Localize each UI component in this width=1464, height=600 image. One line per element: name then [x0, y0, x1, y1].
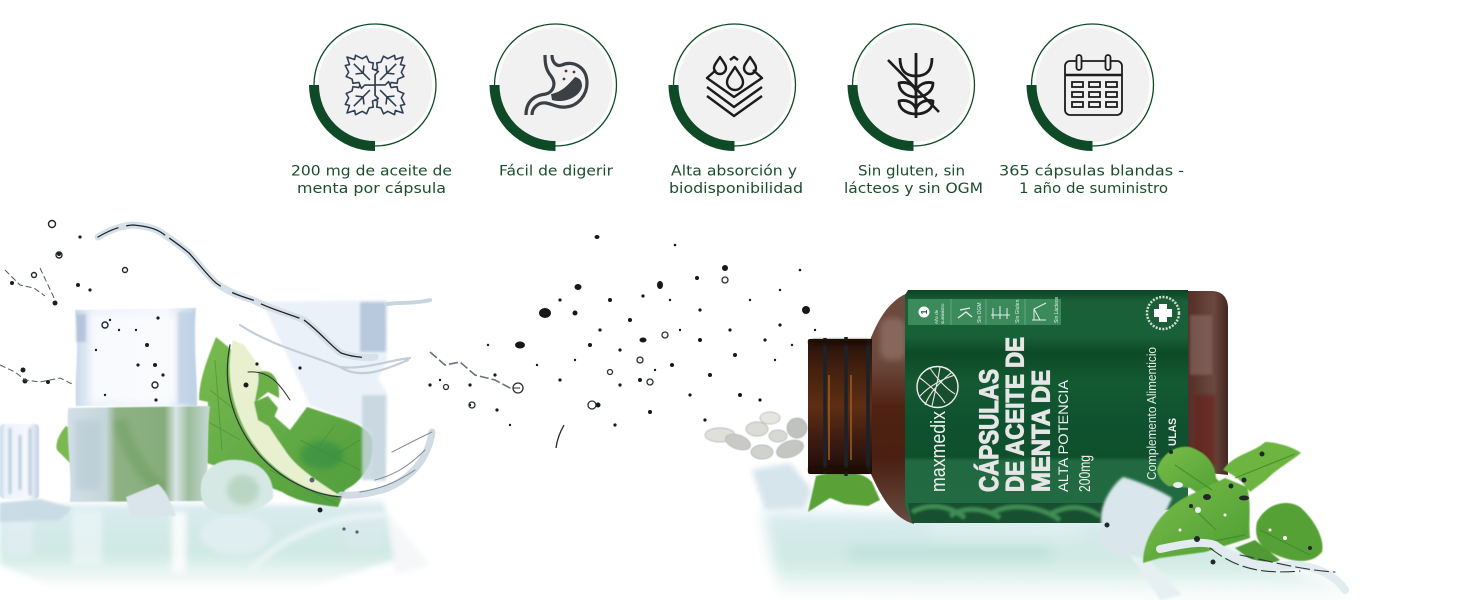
bottle neck — [808, 337, 872, 476]
icon: stomach — [526, 55, 587, 115]
benefit: mint oil — [291, 24, 452, 197]
mint strip on label — [908, 503, 1108, 523]
mint sprig — [1143, 442, 1323, 568]
icon: crossed wheat — [888, 53, 939, 118]
ice cube: upper — [75, 308, 197, 406]
potency text — [1055, 379, 1094, 492]
potency text: ALTA POTENCIA — [1055, 379, 1071, 492]
icon: mint leaves — [337, 47, 413, 123]
label badges strip: Año de — [934, 309, 939, 324]
shard ice below — [1130, 555, 1182, 600]
benefit: absorption — [669, 24, 803, 197]
crushed ice strip — [0, 499, 72, 522]
reflection surface left — [0, 500, 430, 590]
icon: drops over layers — [707, 57, 762, 116]
mint under neck — [808, 472, 880, 512]
ring droplets — [444, 277, 728, 448]
capsule count text: ULAS — [1167, 418, 1179, 446]
reflection surface right — [762, 512, 1345, 600]
caption: gluten free: lácteos y sin OGM — [844, 181, 983, 197]
label badges strip: suministro — [940, 303, 945, 324]
seal — [1147, 297, 1179, 329]
ice cube: lower — [68, 406, 210, 502]
caption: one year supply: 365 cápsulas blandas - — [999, 164, 1184, 180]
caption: mint oil: 200 mg de aceite de — [291, 164, 452, 180]
benefits row — [291, 24, 1184, 197]
benefit: gluten free — [844, 24, 983, 197]
ice chunk in front — [1101, 477, 1172, 560]
lime slice — [230, 340, 341, 496]
caption: one year supply — [999, 164, 1184, 197]
label — [905, 290, 1188, 523]
benefit: easy to digest — [494, 24, 616, 180]
label badges strip: Sin Lácteos — [1054, 296, 1060, 323]
benefit: one year supply — [999, 24, 1184, 197]
caption: mint oil: menta por cápsula — [297, 181, 446, 197]
right scene: bottle, capsules, ice and mint — [705, 290, 1345, 600]
mint leaf behind ice — [56, 337, 373, 507]
label badges strip: Sin Gluten — [1015, 299, 1021, 323]
caption: gluten free: Sin gluten, sin — [858, 164, 965, 180]
bottle base glass — [1180, 291, 1228, 475]
water splash over mint — [1160, 543, 1345, 590]
brand logo — [917, 366, 958, 408]
supplement text: Complemento Alimenticio — [1144, 347, 1159, 480]
middle droplets trail — [428, 235, 816, 448]
caption: easy to digest: Fácil de digerir — [499, 164, 613, 180]
droplets rings left — [32, 220, 158, 388]
dark droplets — [428, 235, 816, 427]
caption: absorption: Alta absorción y — [671, 164, 797, 180]
bottle — [808, 290, 1228, 524]
bottle shoulder — [870, 291, 914, 524]
label badges strip: Sin OGM — [977, 302, 983, 323]
caption: one year supply: 1 año de suministro — [1019, 181, 1168, 197]
caption: absorption: biodisponibilidad — [669, 181, 803, 197]
left scene: ice, mint and water splash — [0, 220, 432, 590]
caption: gluten free — [844, 164, 983, 197]
small ice chunk — [126, 484, 176, 516]
caption: mint oil — [291, 164, 452, 197]
leaf veins — [205, 360, 360, 503]
ice beside bottle — [752, 463, 812, 510]
product title: DE ACEITE DE — [1002, 337, 1030, 492]
brand name: maxmedix — [928, 411, 950, 492]
ice cube: far left — [0, 424, 39, 499]
ice cube: right large — [262, 300, 388, 482]
dark leaf core — [300, 441, 344, 469]
label badges strip: 1 — [920, 309, 929, 314]
product title — [973, 337, 1056, 492]
caption: absorption — [669, 164, 803, 197]
droplets left — [0, 235, 359, 534]
product title: MENTA DE — [1028, 370, 1056, 492]
sprig veins — [1158, 454, 1310, 555]
label badges strip — [908, 296, 1061, 325]
water stream — [98, 225, 432, 497]
product title: CÁPSULAS — [973, 369, 1004, 492]
potency text: 200mg — [1077, 455, 1094, 492]
icon: calendar — [1065, 55, 1122, 115]
soft gel capsules — [705, 412, 807, 461]
droplets on mint — [1104, 450, 1312, 564]
round ice chunk — [201, 460, 273, 514]
splash stream — [430, 352, 520, 388]
